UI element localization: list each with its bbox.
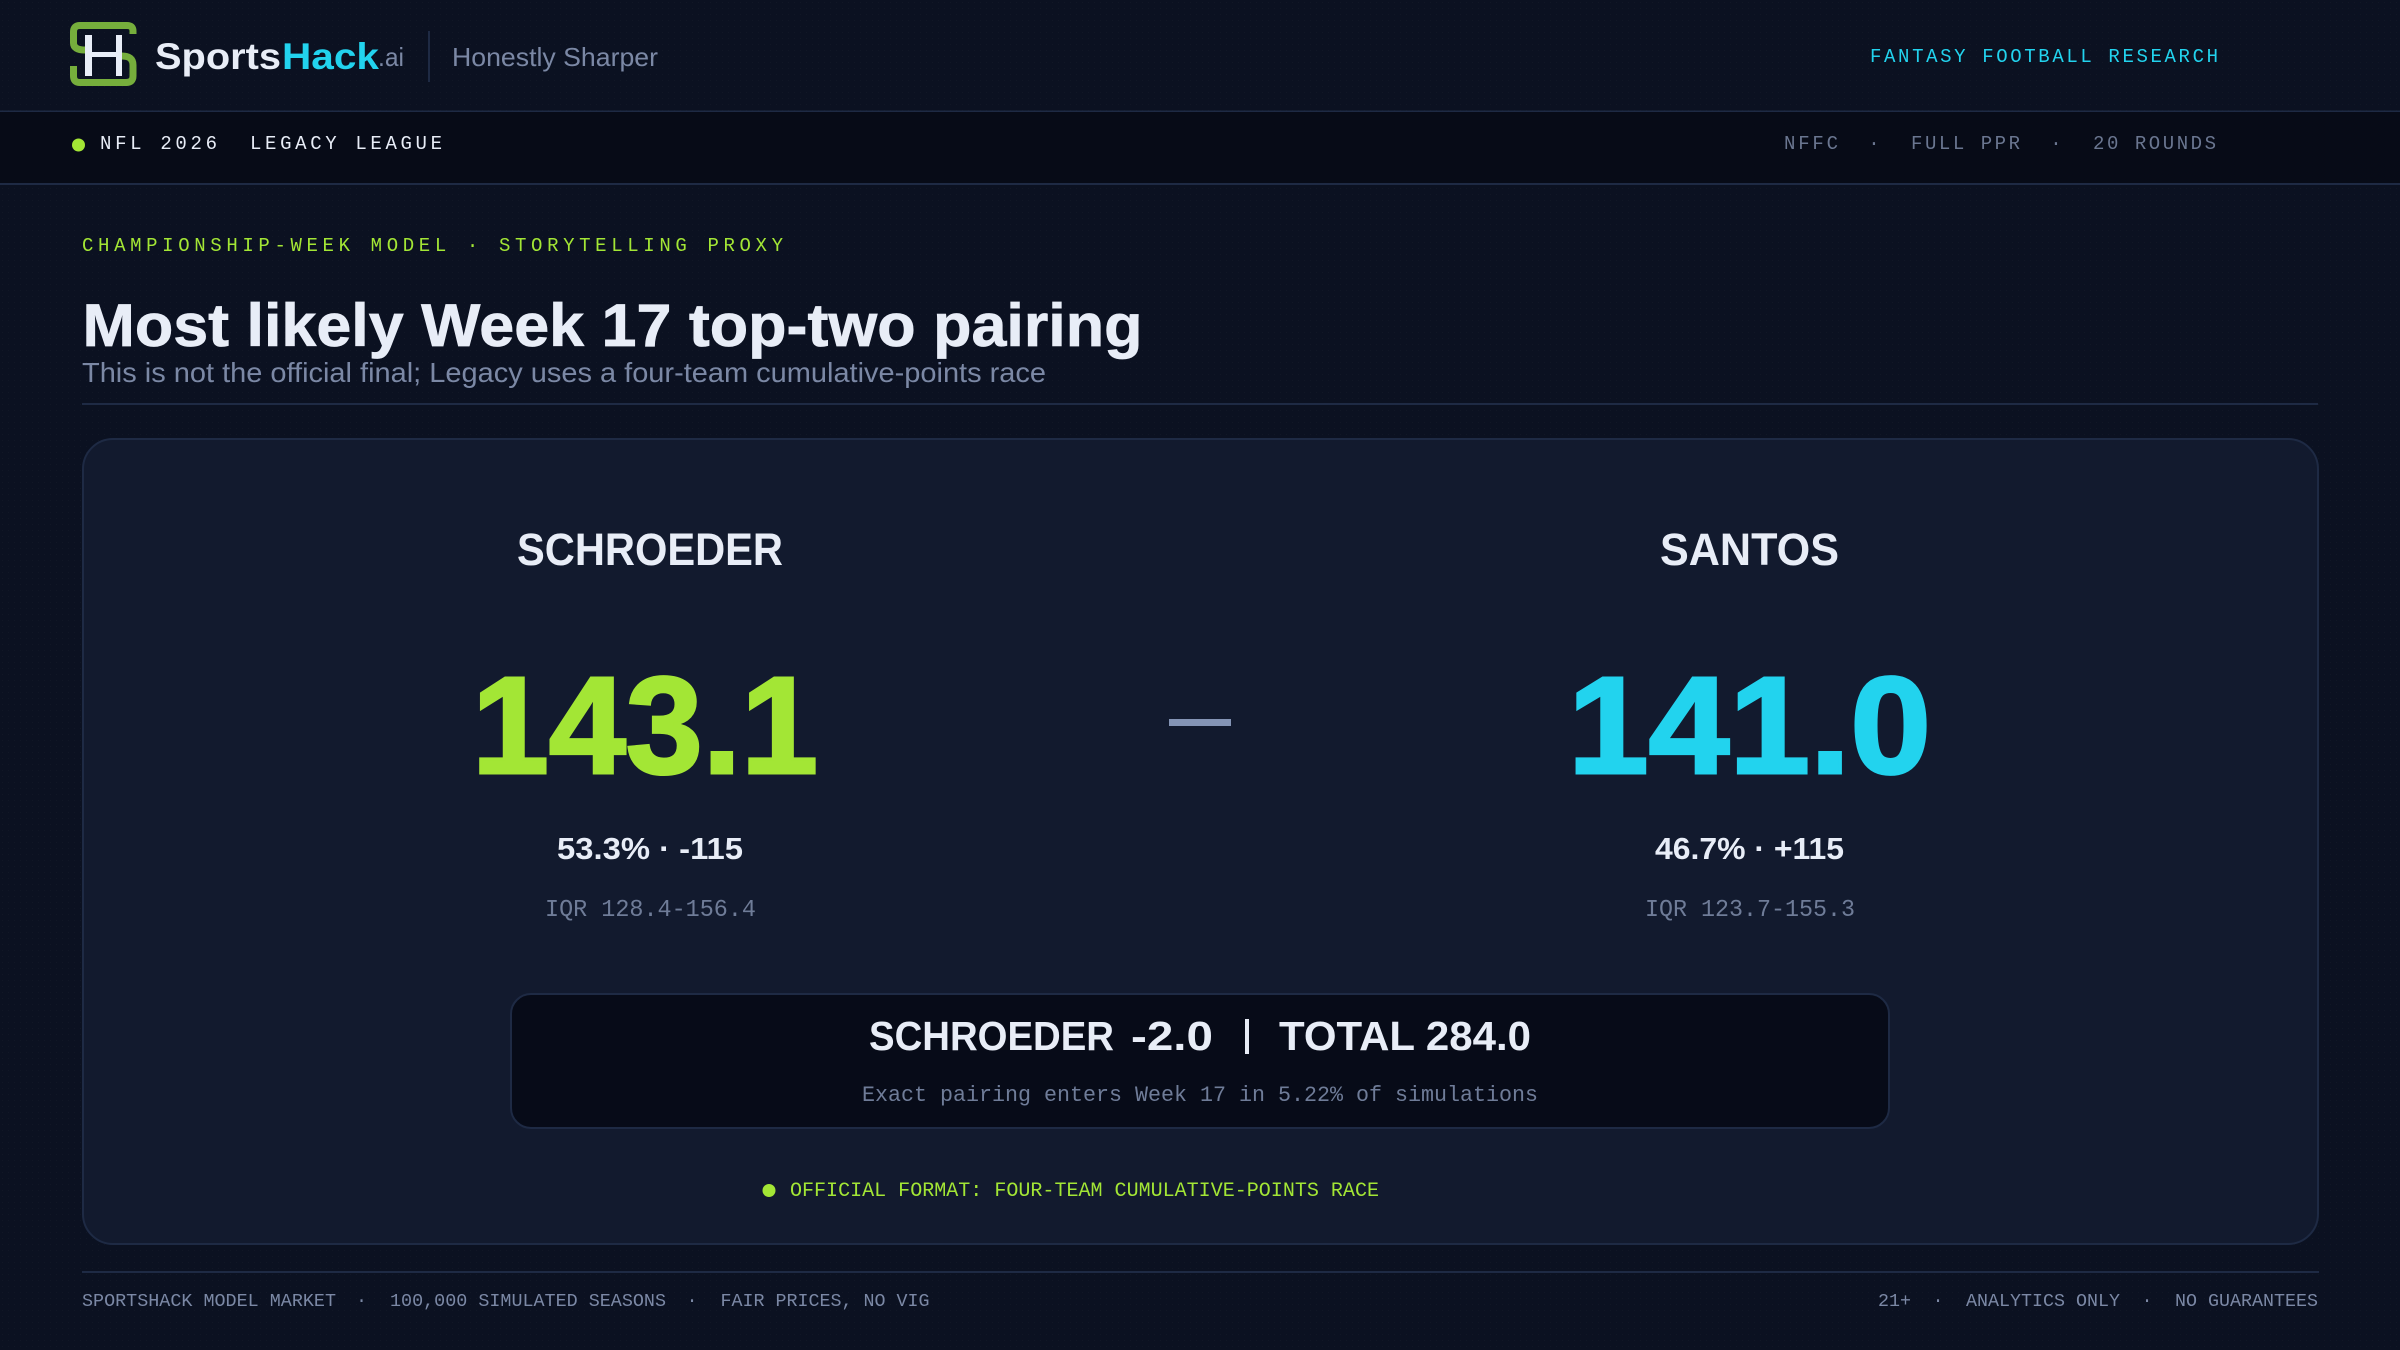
brand wordmark: .ai (378, 42, 404, 72)
eyebrow: CHAMPIONSHIP-WEEK MODEL · STORYTELLING PROXY (82, 235, 784, 257)
win probability and price: 53.3% · -115 (557, 831, 743, 866)
callout: spread and total (511, 994, 1889, 1128)
header bar (0, 0, 2400, 112)
panel: matchup card (83, 439, 2318, 1244)
icon: SportsHack logo (74, 26, 133, 82)
footer: disclaimers (1878, 1292, 2318, 1312)
win probability and price: 46.7% · +115 (1655, 831, 1844, 866)
league settings (1784, 133, 2216, 155)
brand wordmark: Hack (282, 36, 379, 77)
brand wordmark: Sports (155, 36, 281, 77)
pairing note: Exact pairing enters Week 17 in 5.22% of simulations (862, 1083, 1538, 1108)
tagline: Honestly Sharper (452, 42, 658, 72)
team: Schroeder (472, 524, 818, 924)
league settings: FULL PPR (1911, 133, 2020, 155)
projected score: 143.1 (472, 649, 818, 803)
spread and total line: TOTAL 284.0 (1279, 1013, 1531, 1059)
footer: disclaimers: NO GUARANTEES (2175, 1292, 2318, 1312)
league settings: · (2050, 133, 2062, 155)
league settings: 20 ROUNDS (2093, 133, 2216, 155)
footer: source notes: 100,000 SIMULATED SEASONS (390, 1292, 666, 1312)
footer: source notes (82, 1292, 930, 1312)
team name: SANTOS (1660, 524, 1839, 575)
footer: disclaimers: 21+ (1878, 1292, 1911, 1312)
brand wordmark (155, 36, 404, 77)
league name: LEGACY LEAGUE (250, 133, 442, 155)
league name (100, 133, 442, 155)
league settings: · (1868, 133, 1880, 155)
separator dash (1169, 719, 1231, 726)
title: Most likely Week 17 top-two pairing (82, 292, 1142, 359)
interquartile range: IQR 123.7-155.3 (1645, 897, 1855, 924)
footer: disclaimers: · (2142, 1292, 2152, 1312)
spread and total line: -2.0 (1131, 1013, 1213, 1059)
footer: source notes: · (356, 1292, 367, 1312)
league name: NFL 2026 (100, 133, 217, 155)
subtitle: This is not the official final; Legacy uses a four-team cumulative-points race (82, 357, 1046, 388)
spread and total line (869, 1013, 1531, 1059)
footer: disclaimers: · (1933, 1292, 1943, 1312)
header label: FANTASY FOOTBALL RESEARCH (1870, 46, 2218, 68)
footer: source notes: FAIR PRICES, NO VIG (720, 1292, 930, 1312)
footer: disclaimers: ANALYTICS ONLY (1966, 1292, 2120, 1312)
projected score: 141.0 (1568, 649, 1931, 803)
official format note: OFFICIAL FORMAT: FOUR-TEAM CUMULATIVE-POINTS RACE (790, 1180, 1379, 1203)
footer: source notes: SPORTSHACK MODEL MARKET (82, 1292, 336, 1312)
status dot (72, 138, 85, 152)
team name: SCHROEDER (517, 524, 783, 575)
footer: source notes: · (687, 1292, 697, 1312)
league settings: NFFC (1784, 133, 1838, 155)
league strip (0, 110, 2400, 185)
interquartile range: IQR 128.4-156.4 (545, 897, 756, 924)
team: Santos (1568, 524, 1931, 924)
spread and total line: SCHROEDER (869, 1013, 1114, 1059)
